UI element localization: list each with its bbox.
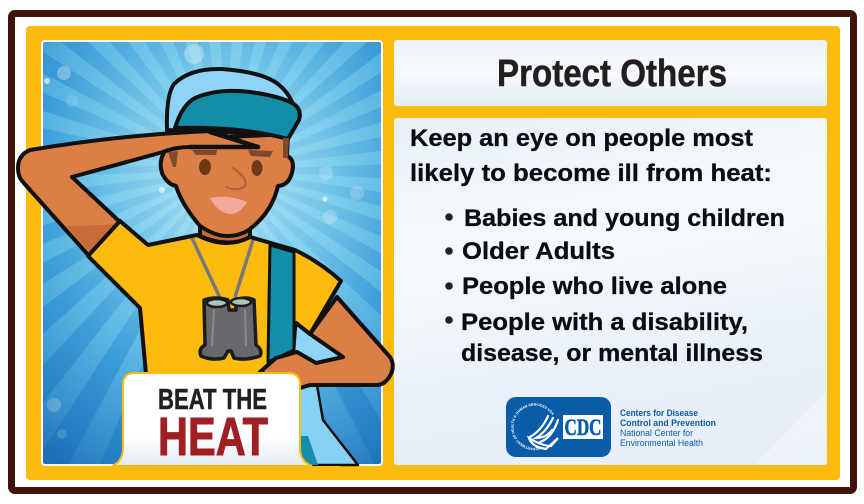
background bokeh lights <box>44 44 364 439</box>
bullet list: Babies and young children <box>464 205 785 232</box>
CDC organization text <box>620 408 716 448</box>
neck <box>200 220 250 243</box>
CDC organization text: National Center for <box>620 428 693 438</box>
panel: body box <box>394 118 827 465</box>
HHS eagle seal: DEPARTMENT OF HEALTH & HUMAN SERVICES USA <box>511 403 554 450</box>
shoulder strap <box>268 245 294 362</box>
panel: sunburst illustration background <box>41 40 383 466</box>
cap <box>167 69 300 139</box>
right arm on hip <box>260 297 393 388</box>
bullet list: People with a disability, <box>461 309 748 336</box>
beat the heat badge: HEAT <box>158 407 268 467</box>
CDC wordmark box: CDC <box>564 415 602 440</box>
intro text <box>410 125 772 187</box>
yellow shirt <box>88 221 341 385</box>
CDC organization text: Environmental Health <box>620 438 703 448</box>
bag below arm <box>294 324 358 465</box>
decorative corner sheen <box>755 392 826 465</box>
intro text: likely to become ill from heat: <box>410 160 772 187</box>
bullet list: Older Adults <box>462 238 615 265</box>
face details <box>168 138 289 214</box>
beat the heat badge <box>112 373 312 467</box>
bullet list: People who live alone <box>462 273 727 300</box>
beat the heat badge: BEAT THE <box>158 384 267 416</box>
title: Protect Others <box>497 53 727 95</box>
head <box>161 134 293 236</box>
panel: title box <box>394 40 827 106</box>
raised left arm <box>18 131 258 257</box>
illustration: person with binoculars <box>18 69 393 465</box>
bullet list <box>445 205 785 367</box>
bottom yellow strip covering overflow <box>100 466 340 479</box>
CDC logo <box>506 397 611 457</box>
bullet list: disease, or mental illness <box>461 340 763 367</box>
binocular lanyard <box>192 238 253 298</box>
intro text: Keep an eye on people most <box>410 125 753 152</box>
CDC organization text: Centers for Disease <box>620 408 698 418</box>
binoculars <box>200 298 261 359</box>
CDC organization text: Control and Prevention <box>620 418 716 428</box>
